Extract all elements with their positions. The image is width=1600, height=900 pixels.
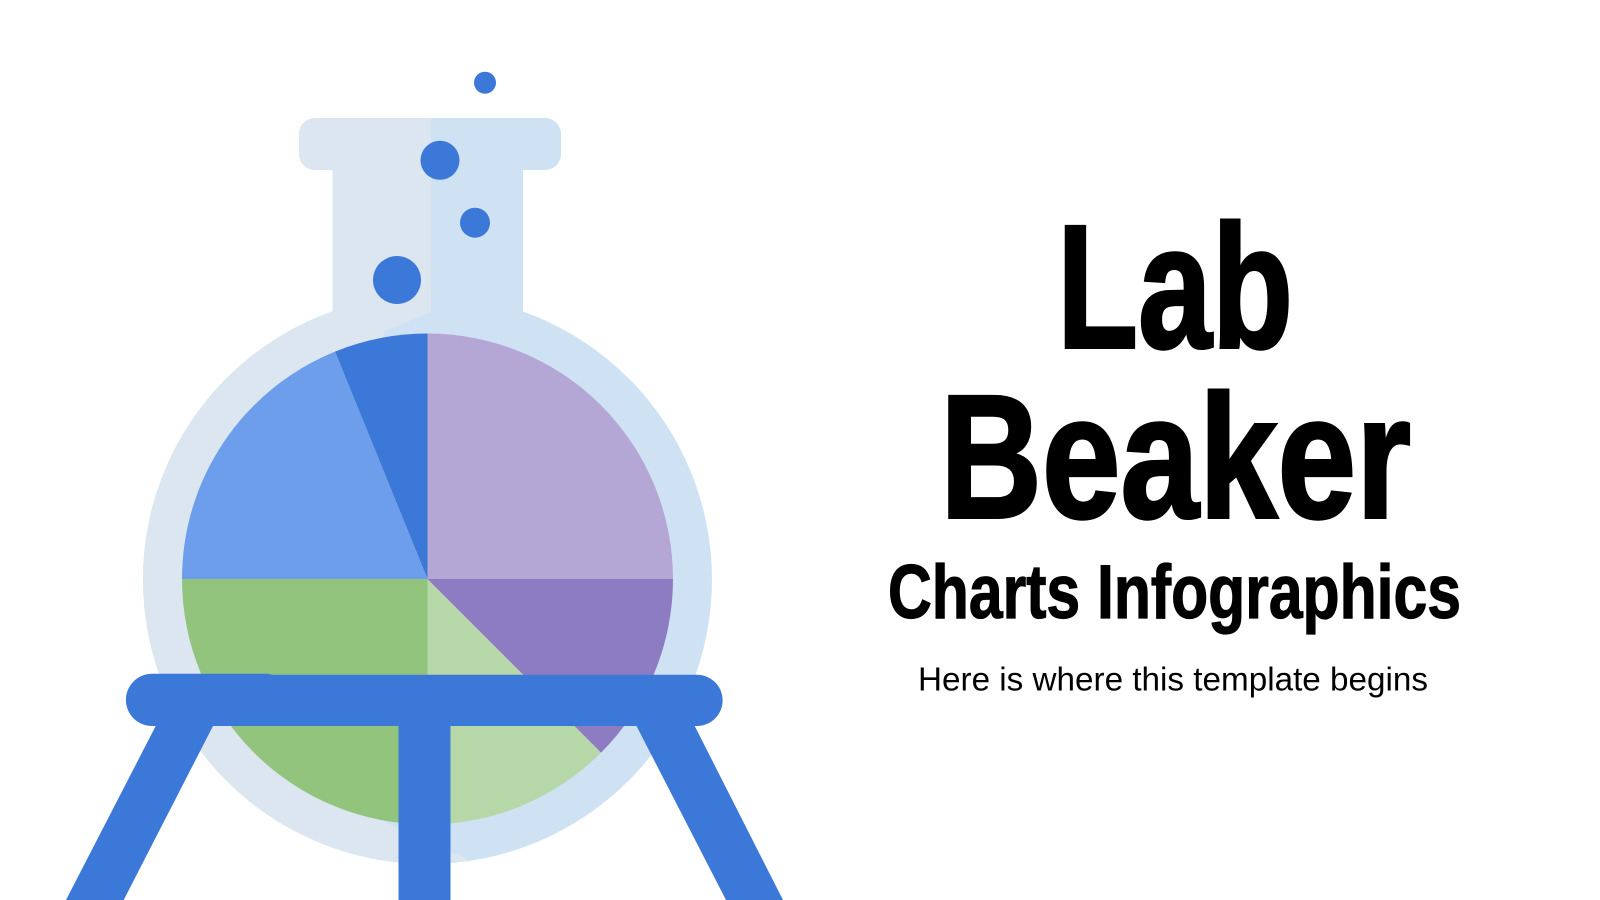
stand right leg <box>636 726 783 900</box>
slice: light purple <box>428 334 673 579</box>
beaker illustration <box>66 72 783 900</box>
title: Beaker: Beaker <box>940 360 1411 556</box>
subtitle: Charts Infographics: Charts Infographics <box>888 550 1461 635</box>
slice: blue <box>335 334 428 579</box>
slice: light green <box>428 579 601 824</box>
slice: green <box>182 579 428 824</box>
bubbles <box>373 72 496 304</box>
slice: dark purple <box>428 579 673 753</box>
title block <box>888 190 1461 698</box>
stand left leg <box>66 726 213 900</box>
tagline: Here is where this template begins <box>918 660 1428 698</box>
flask body <box>143 118 712 864</box>
title: Lab: Lab <box>1057 190 1293 386</box>
slice: light blue <box>182 352 428 579</box>
stand <box>66 674 783 900</box>
stand top bar <box>126 674 723 726</box>
pie chart <box>182 334 673 824</box>
stand middle leg <box>398 720 450 900</box>
